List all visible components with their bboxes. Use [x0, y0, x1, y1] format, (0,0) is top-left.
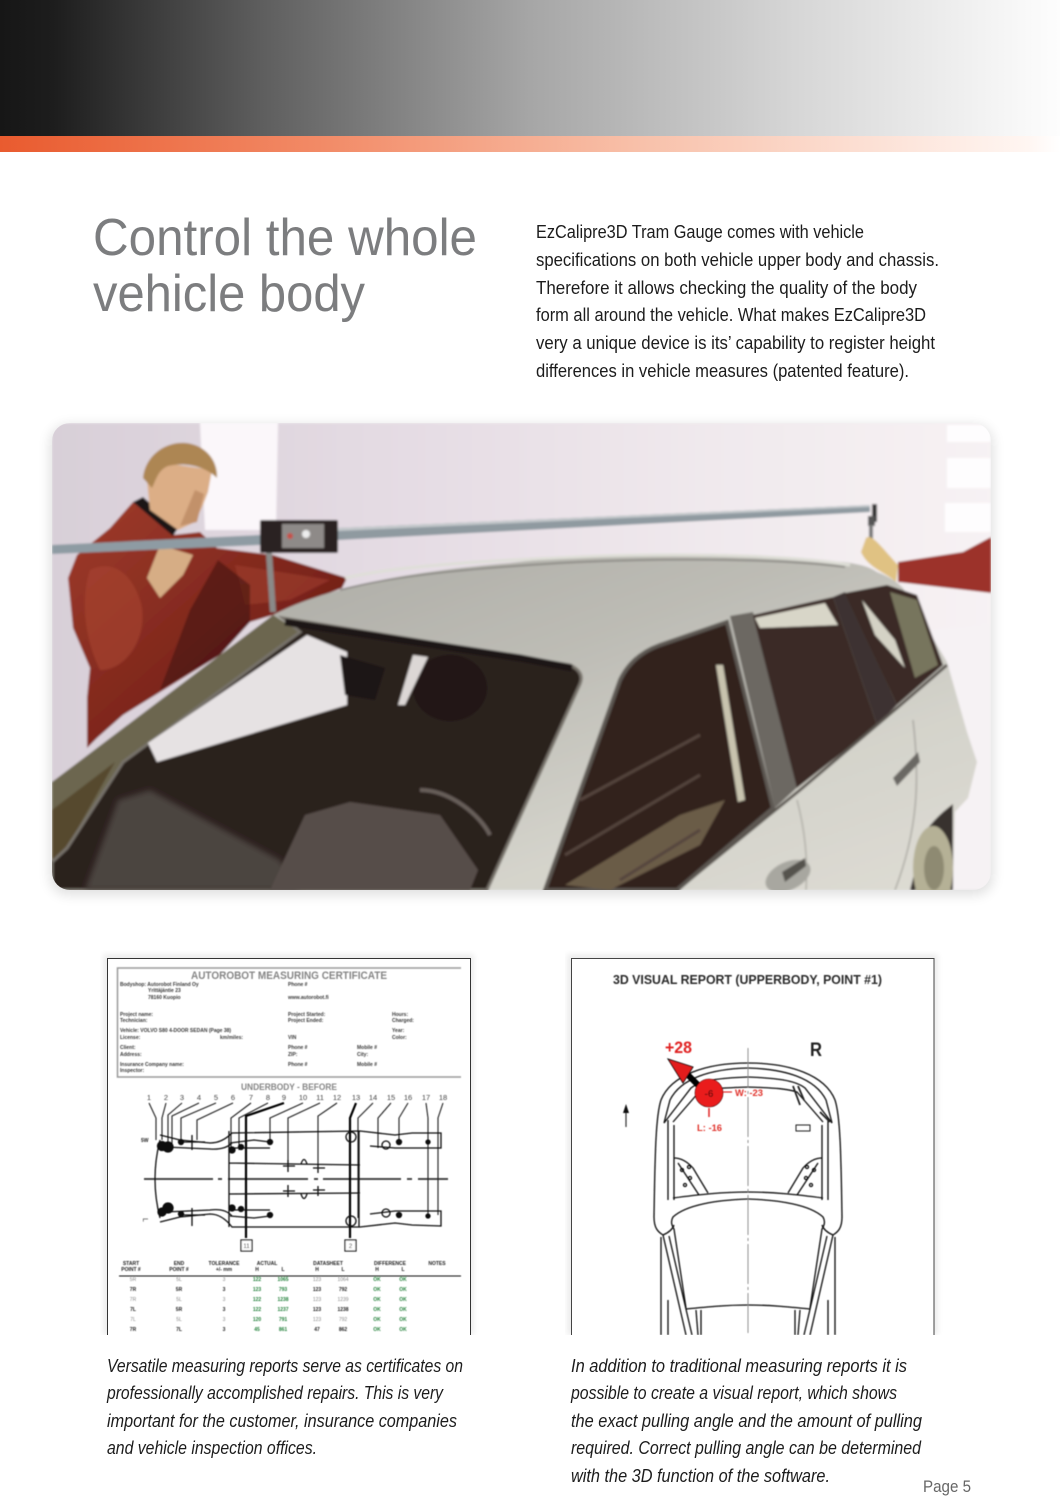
- measurement table: OK: [399, 1287, 407, 1293]
- measurement table: L: [341, 1267, 345, 1273]
- gauge bar: [52, 535, 260, 554]
- gauge leg: [266, 553, 276, 612]
- certificate header box: [118, 968, 461, 1077]
- header gradient band: [0, 0, 1060, 136]
- man head: [143, 443, 217, 530]
- measurement table: 792: [339, 1287, 347, 1293]
- point boxes: 11: [243, 1244, 250, 1250]
- caption: measuring reports: Versatile measuring reports serve as certificates on: [107, 1356, 463, 1376]
- windshield top rubber: [285, 622, 572, 668]
- page number: Page 5: [923, 1477, 971, 1496]
- measurement table: 123: [313, 1307, 321, 1313]
- measurement table: 5R: [176, 1307, 183, 1313]
- measurement table: 7L: [130, 1307, 136, 1313]
- steering wheel: [420, 790, 490, 835]
- measurement table: 45: [254, 1327, 260, 1333]
- measurement table: 123: [253, 1287, 261, 1293]
- measurement table: 123: [313, 1297, 321, 1303]
- width value: [723, 1088, 763, 1099]
- measurement table: 3: [223, 1297, 226, 1303]
- certificate header box: License:: [120, 1035, 141, 1041]
- measurement table: L: [401, 1267, 405, 1273]
- caption: measuring reports: professionally accomplished repairs. This is very: [106, 1383, 444, 1403]
- measurement table: 5R: [176, 1287, 183, 1293]
- certificate header box: Yrittäjäntie 23: [148, 988, 181, 994]
- measurement table: 1065: [277, 1277, 289, 1283]
- photo shadow: [50, 425, 993, 895]
- measurement table: 7R: [130, 1327, 137, 1333]
- point boxes: 2: [349, 1244, 353, 1250]
- point numbers: 4: [197, 1093, 201, 1102]
- c-pillar: [833, 592, 897, 725]
- measurement table: H: [375, 1267, 379, 1273]
- point numbers: 8: [266, 1093, 270, 1102]
- b-pillar: [730, 612, 800, 808]
- certificate header box: www.autorobot.fi: [287, 995, 329, 1001]
- measurement table: OK: [399, 1277, 407, 1283]
- measurement table: DATASHEET: [313, 1261, 343, 1267]
- measurement table: 792: [339, 1317, 347, 1323]
- intro paragraph: form all around the vehicle. What makes EzCalipre3D: [536, 305, 926, 325]
- certificate header box: Charged:: [392, 1018, 414, 1024]
- measurement table: 1238: [337, 1307, 349, 1313]
- measurement table: 7R: [130, 1287, 137, 1293]
- windshield: [52, 618, 581, 890]
- point numbers: 12: [333, 1093, 341, 1102]
- certificate header box: Inspector:: [120, 1068, 145, 1074]
- certificate header box: Address:: [120, 1052, 142, 1058]
- certificate header box: ZIP:: [288, 1052, 298, 1058]
- small rectangle symbol: [796, 1125, 810, 1131]
- width value: W: -23: [735, 1088, 763, 1099]
- panel: photo of man measuring car roof with tram gauge: [52, 423, 991, 910]
- point numbers: 10: [299, 1093, 307, 1102]
- interior mirror: [340, 655, 385, 700]
- point numbers: 7: [249, 1093, 253, 1102]
- point numbers: 14: [369, 1093, 377, 1102]
- intro paragraph: EzCalipre3D Tram Gauge comes with vehicle: [536, 222, 864, 242]
- side window front door: [545, 622, 773, 890]
- intro paragraph: [536, 222, 939, 381]
- certificate header box: Year:: [392, 1028, 405, 1034]
- measurement table: 47: [314, 1327, 320, 1333]
- measurement table: 7R: [130, 1297, 137, 1303]
- man collar: [133, 497, 178, 536]
- certificate header box: Project name:: [120, 1012, 153, 1018]
- man hand: [147, 545, 193, 598]
- measurement table: OK: [373, 1277, 381, 1283]
- right wall panels: [945, 425, 991, 532]
- headrest: [413, 655, 487, 721]
- measurement table: 123: [313, 1287, 321, 1293]
- roof rail: [345, 555, 850, 578]
- measurement table: POINT #: [169, 1267, 189, 1273]
- measurement table: 3: [223, 1317, 226, 1323]
- measurement table: 7L: [176, 1327, 182, 1333]
- point numbers: 2: [164, 1093, 168, 1102]
- length value: [697, 1108, 722, 1134]
- measurement table: TOLERANCE: [208, 1261, 240, 1267]
- measurement table: OK: [373, 1297, 381, 1303]
- caption: measuring reports: [106, 1356, 463, 1458]
- panel: 3D visual report: [567, 954, 938, 1338]
- report shadow: [567, 954, 938, 1335]
- report sheet: [572, 958, 934, 1338]
- measurement table: END: [174, 1261, 185, 1267]
- title: vehicle body: [93, 265, 365, 323]
- pull arrow: [668, 1059, 698, 1085]
- measurement table: 1064: [337, 1277, 349, 1283]
- certificate header box: VIN: [288, 1035, 297, 1041]
- measurement table: 123: [313, 1317, 321, 1323]
- point numbers: 1: [147, 1093, 151, 1102]
- measurement table: 791: [279, 1317, 287, 1323]
- point numbers: 9: [282, 1093, 286, 1102]
- measurement table: START: [123, 1261, 139, 1267]
- centre line: [747, 1048, 749, 1335]
- certificate header box: 78160 Kuopio: [148, 995, 181, 1001]
- certificate header box: Phone #: [288, 982, 308, 988]
- measurement table: 5R: [130, 1277, 137, 1283]
- certificate header box: Insurance Company name:: [120, 1062, 184, 1068]
- hand on right: [861, 537, 898, 582]
- certificate header box: Vehicle: VOLVO S80 4-DOOR SEDAN (Page 38): [120, 1028, 231, 1034]
- title: Control the whole: [93, 209, 477, 267]
- measurement table: NOTES: [428, 1261, 446, 1267]
- certificate header box: km/miles:: [220, 1035, 243, 1041]
- intro paragraph: very a unique device is its’ capability to register height: [536, 333, 935, 353]
- measurement table: 120: [253, 1317, 261, 1323]
- intro paragraph: differences in vehicle measures (patented feature).: [536, 361, 909, 381]
- measurement table: 122: [253, 1307, 261, 1313]
- point numbers: [147, 1093, 447, 1102]
- measurement table: L: [281, 1267, 285, 1273]
- R label: R: [810, 1040, 822, 1061]
- side labels: 5W: [141, 1138, 149, 1144]
- measurement table: OK: [373, 1287, 381, 1293]
- measurement table: OK: [399, 1297, 407, 1303]
- interior lower dashboard: [85, 790, 300, 890]
- measurement table: H: [255, 1267, 259, 1273]
- certificate header box: Phone #: [288, 1062, 308, 1068]
- certificate header box: City:: [357, 1052, 368, 1058]
- measurement table: 3: [223, 1327, 226, 1333]
- measurement table: 123: [313, 1277, 321, 1283]
- measurement table: [119, 1261, 461, 1333]
- point numbers: 16: [404, 1093, 412, 1102]
- orange accent band: [0, 136, 1060, 152]
- window sill chrome: [697, 663, 948, 874]
- gauge display unit: [260, 520, 338, 553]
- certificate header box: Bodyshop: Autorobot Finland Oy: [120, 982, 199, 988]
- right end of gauge: [868, 504, 877, 555]
- certificate header box: Mobile #: [357, 1045, 377, 1051]
- caption: visual report: [570, 1356, 922, 1486]
- measurement table: ACTUAL: [257, 1261, 277, 1267]
- floor: [930, 625, 991, 890]
- intro paragraph: specifications on both vehicle upper body and chassis.: [536, 250, 939, 270]
- measurement table: OK: [373, 1307, 381, 1313]
- measurement table: POINT #: [121, 1267, 141, 1273]
- caption: measuring reports: important for the customer, insurance companies: [107, 1411, 457, 1431]
- man jacket: [68, 502, 347, 748]
- measurement table: 3: [223, 1287, 226, 1293]
- point numbers: 17: [422, 1093, 430, 1102]
- car body: [272, 556, 978, 890]
- measurement table: 122: [253, 1277, 261, 1283]
- caption: visual report: In addition to traditional measuring reports it is: [571, 1356, 907, 1376]
- report sheet: [108, 958, 470, 1338]
- a-pillar: [52, 614, 298, 826]
- centre line: [144, 1178, 448, 1180]
- red measurement circle: [695, 1079, 723, 1107]
- caption: visual report: possible to create a visual report, which shows: [570, 1383, 897, 1403]
- side window rear door: [753, 597, 877, 788]
- point numbers: 6: [231, 1093, 235, 1102]
- measurement table: DIFFERENCE: [374, 1261, 407, 1267]
- certificate header box: Project Ended:: [288, 1018, 324, 1024]
- certificate header box: Client:: [120, 1045, 136, 1051]
- point numbers: 18: [439, 1093, 447, 1102]
- measurement table: 7L: [130, 1317, 136, 1323]
- panel: measuring certificate report: [103, 954, 474, 1338]
- certificate header box: Hours:: [392, 1012, 408, 1018]
- certificate header box: Technician:: [120, 1018, 148, 1024]
- chassis centre frame: [229, 1131, 360, 1227]
- small direction arrow: [623, 1104, 629, 1127]
- point numbers: 15: [387, 1093, 395, 1102]
- height value: +28: [665, 1038, 692, 1057]
- lower rail: [160, 1210, 441, 1227]
- certificate header box: Project Started:: [288, 1012, 326, 1018]
- measurement table: H: [315, 1267, 319, 1273]
- report sheet: L: [141, 1218, 148, 1222]
- measurement table: 3: [223, 1277, 226, 1283]
- measurement table: 861: [279, 1327, 287, 1333]
- caption: visual report: required. Correct pulling angle can be determined: [571, 1438, 922, 1458]
- leader lines: [149, 1103, 443, 1238]
- car body outline: [654, 1063, 842, 1335]
- point numbers: 5: [214, 1093, 218, 1102]
- door handle rear: [893, 752, 920, 786]
- point numbers: 3: [180, 1093, 184, 1102]
- measurement table: OK: [373, 1317, 381, 1323]
- measurement table: 5L: [176, 1317, 182, 1323]
- report shadow: [103, 954, 474, 1335]
- measurement table: 1238: [277, 1297, 289, 1303]
- underbody chassis diagram: [144, 1103, 448, 1238]
- measurement table: 1237: [277, 1307, 289, 1313]
- roof bracket right: [793, 1086, 830, 1122]
- wall background: [52, 423, 991, 782]
- point boxes: [241, 1240, 356, 1251]
- measurement table: 5L: [176, 1277, 182, 1283]
- underbody heading: UNDERBODY - BEFORE: [241, 1082, 337, 1092]
- certificate header box: Mobile #: [357, 1062, 377, 1068]
- measurement table: OK: [399, 1317, 407, 1323]
- caption: measuring reports: and vehicle inspection offices.: [107, 1438, 317, 1458]
- rear quarter window: [845, 585, 943, 705]
- title: [93, 209, 477, 323]
- upper rail: [160, 1131, 441, 1149]
- door seams: [895, 720, 917, 890]
- measurement table: 1239: [337, 1297, 349, 1303]
- door handle front: [764, 859, 812, 890]
- mounting marks: [158, 1140, 430, 1218]
- measurement table: OK: [373, 1327, 381, 1333]
- measurement table: 3: [223, 1307, 226, 1313]
- measurement table: OK: [399, 1307, 407, 1313]
- measurement table: 5L: [176, 1297, 182, 1303]
- measurement table: +/- mm: [216, 1267, 233, 1273]
- caption: visual report: the exact pulling angle and the amount of pulling: [571, 1411, 922, 1431]
- bright window behind man: [200, 423, 278, 530]
- report heading: 3D VISUAL REPORT (UPPERBODY, POINT #1): [613, 973, 882, 987]
- point numbers: 13: [352, 1093, 360, 1102]
- certificate header box: Phone #: [288, 1045, 308, 1051]
- caption: visual report: with the 3D function of the software.: [571, 1466, 830, 1486]
- red measurement circle: -6: [705, 1089, 714, 1100]
- measurement table: 862: [339, 1327, 347, 1333]
- measurement table: 793: [279, 1287, 287, 1293]
- measurement table: OK: [399, 1327, 407, 1333]
- certificate header box: Color:: [392, 1035, 407, 1041]
- wheel arch and wheel: [910, 804, 953, 890]
- intro paragraph: Therefore it allows checking the quality of the body: [536, 278, 917, 298]
- length value: L: -16: [697, 1123, 722, 1134]
- windshield view through glass: [148, 635, 347, 762]
- measurement table: 122: [253, 1297, 261, 1303]
- certificate header box: AUTOROBOT MEASURING CERTIFICATE: [191, 970, 387, 982]
- sleeve on right: [898, 537, 991, 593]
- point numbers: 11: [316, 1093, 324, 1102]
- front curve: [155, 1140, 160, 1218]
